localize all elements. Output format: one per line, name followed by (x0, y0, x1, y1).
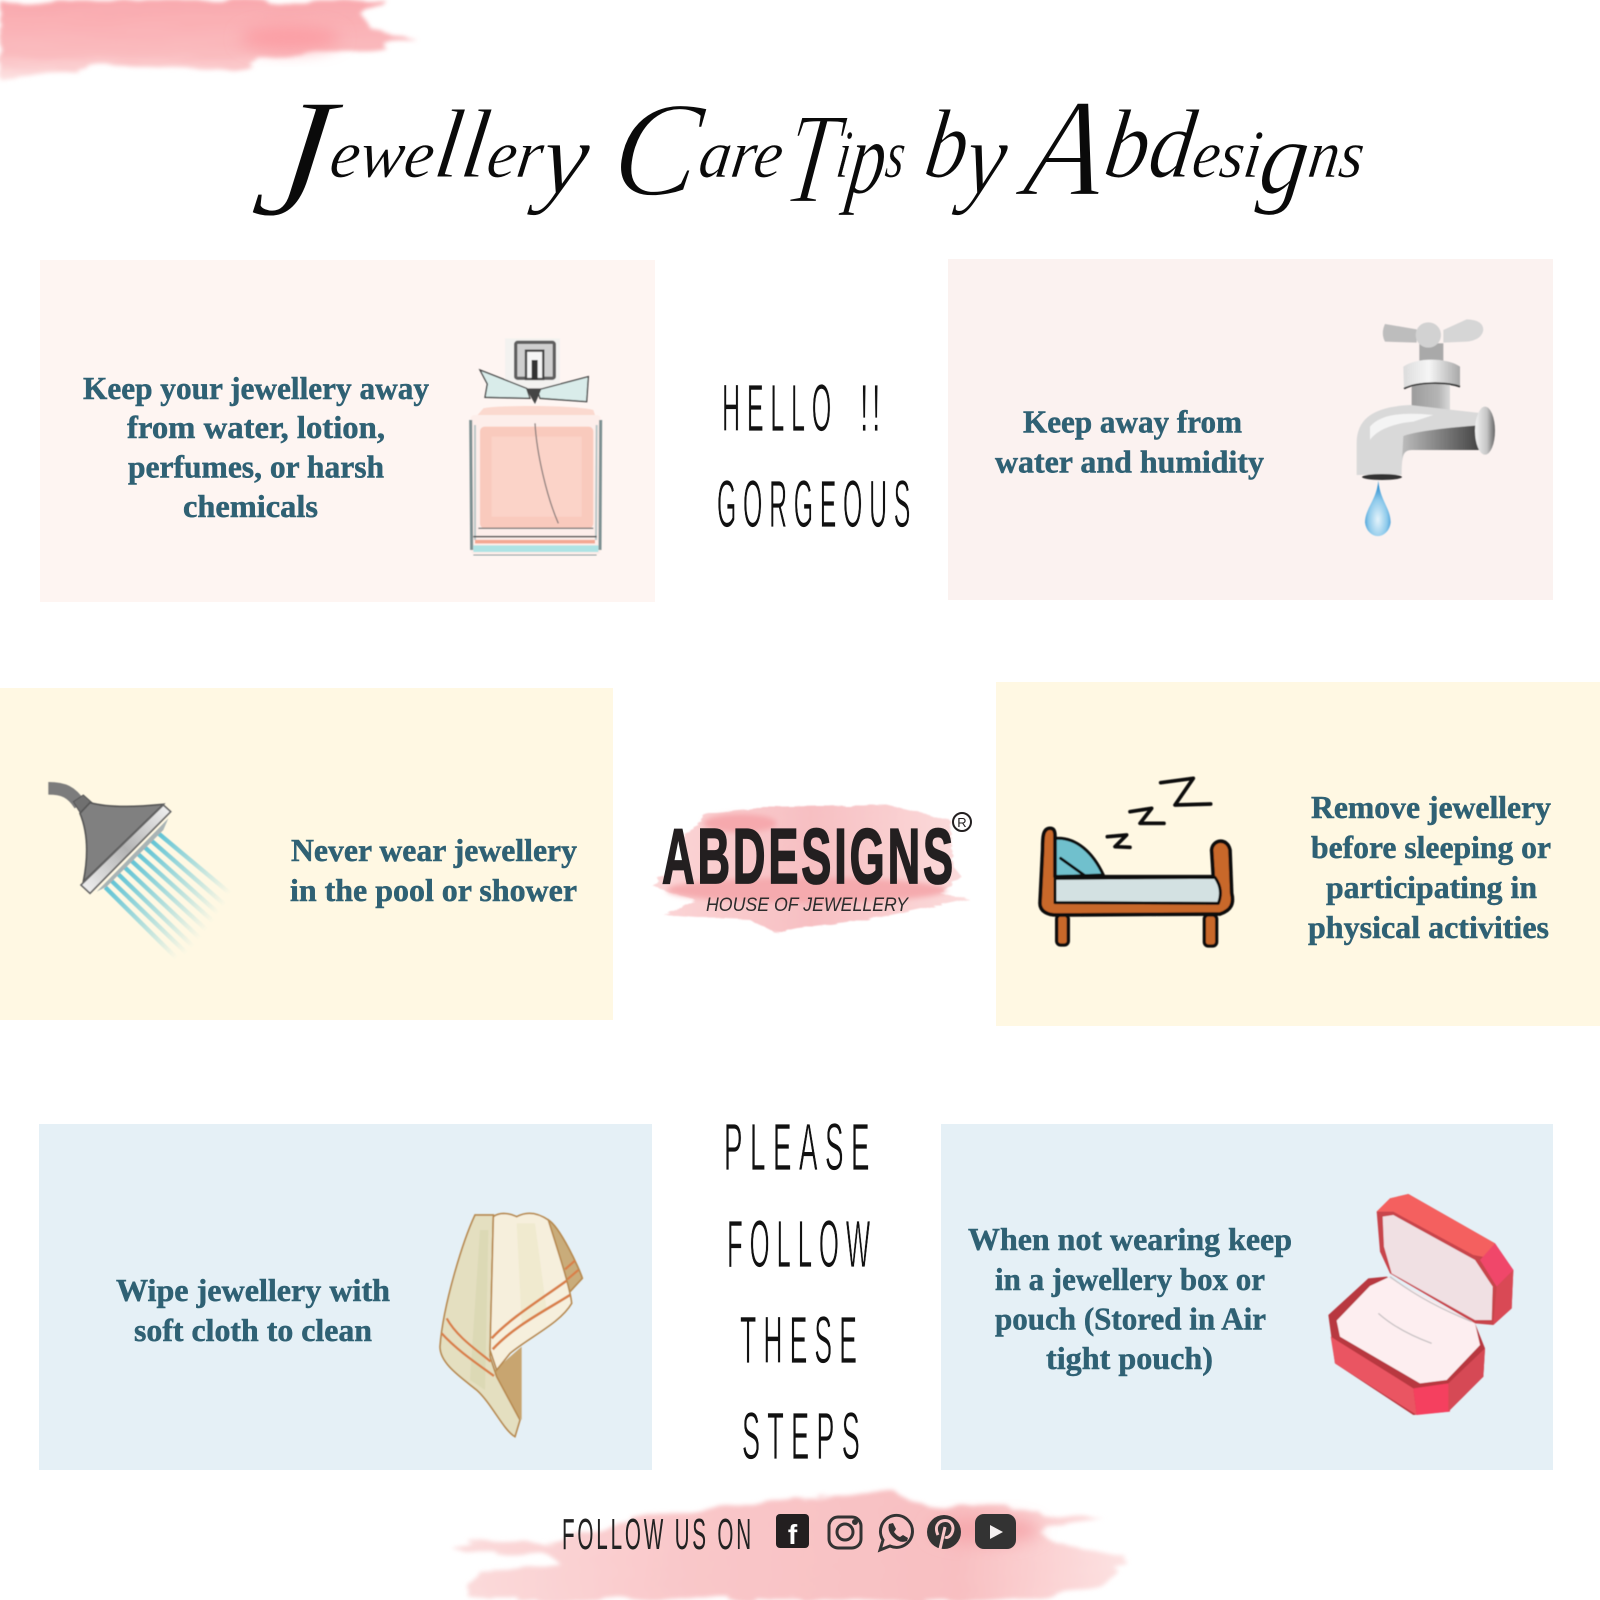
icon: pinterest (927, 1515, 961, 1549)
cloth tip text: Wipe jewellery with (116, 1272, 390, 1308)
title: g (1253, 99, 1317, 216)
box tip text: When not wearing keep (968, 1221, 1292, 1257)
icon: facebook: f (788, 1519, 798, 1550)
box tip text: pouch (Stored in Air (995, 1300, 1266, 1336)
water tip text: water and humidity (995, 443, 1264, 479)
perfume tip text: chemicals (183, 488, 318, 524)
title (243, 64, 1376, 252)
sleeping tip text: before sleeping or (1311, 829, 1551, 865)
title: are (695, 116, 789, 192)
panel: water tip (948, 259, 1553, 600)
icon: youtube (975, 1514, 1016, 1549)
panel: jewellery box tip (941, 1124, 1553, 1470)
title: y (526, 99, 597, 216)
greeting: hello gorgeous: HELLO (722, 371, 838, 446)
footer: follow us on (449, 1493, 1128, 1600)
box tip text (968, 1221, 1292, 1376)
sleeping tip text: Remove jewellery (1311, 789, 1551, 825)
title: bd (1098, 90, 1203, 199)
title: J (243, 64, 351, 252)
title: b (919, 90, 976, 199)
logo wordmark: ABDESIGNS (662, 812, 956, 900)
logo: Abdesigns house of jewellery (653, 805, 971, 932)
shower tip text: in the pool or shower (290, 872, 577, 908)
title: s (882, 116, 911, 192)
panel: pool and shower tip (0, 688, 613, 1020)
icon: ring box (1328, 1194, 1513, 1415)
icon: whatsapp (880, 1515, 912, 1550)
water tip text: Keep away from (1023, 404, 1242, 440)
greeting: hello gorgeous (717, 371, 917, 542)
logo watercolour brush (653, 805, 968, 932)
water tip text (995, 404, 1264, 479)
icon: perfume bottle (471, 338, 601, 555)
box tip text: in a jewellery box or (995, 1261, 1265, 1297)
footer: follow us on: FOLLOW US ON (562, 1510, 754, 1559)
text: THESE (740, 1303, 864, 1378)
panel: perfume tip (40, 260, 655, 602)
panel: sleeping tip (996, 682, 1600, 1026)
logo tagline: HOUSE OF JEWELLERY (706, 894, 910, 916)
title: esi (1188, 116, 1274, 192)
shower tip text: Never wear jewellery (291, 832, 577, 868)
cloth tip text (116, 1272, 390, 1348)
text: STEPS (742, 1399, 867, 1474)
title: ns (1304, 116, 1370, 192)
perfume tip text: Keep your jewellery away (83, 370, 429, 406)
icon: instagram (829, 1517, 861, 1548)
perfume tip text (83, 370, 429, 524)
sleeping tip text: physical activities (1308, 909, 1549, 945)
title: y (951, 99, 1015, 216)
icon: dripping tap (1357, 319, 1495, 536)
title: p (837, 99, 895, 216)
closing message: please follow these steps (724, 1110, 877, 1474)
icon: sleeping bed (1040, 778, 1232, 946)
sleeping tip text (1308, 789, 1551, 945)
panel: soft cloth tip (39, 1124, 652, 1470)
icon: facebook (776, 1514, 809, 1550)
title: ewe (326, 116, 440, 192)
perfume tip text: perfumes, or harsh (128, 448, 384, 484)
title: ller (428, 90, 550, 199)
title: A (1010, 72, 1117, 226)
box tip text: tight pouch) (1046, 1340, 1213, 1376)
icon: towel (440, 1213, 582, 1437)
title: i (833, 116, 856, 192)
text: PLEASE (724, 1110, 877, 1185)
title: T (777, 88, 853, 231)
registered mark: R (957, 815, 967, 830)
sleeping tip text: participating in (1326, 869, 1537, 905)
watercolour brush: footer (449, 1493, 1128, 1600)
icon: shower head (48, 788, 230, 958)
cloth tip text: soft cloth to clean (134, 1312, 372, 1348)
shower tip text (290, 832, 577, 908)
text: FOLLOW (727, 1207, 877, 1282)
watercolour brush: top left (0, 0, 415, 80)
text: GORGEOUS (717, 467, 917, 542)
title: C (604, 74, 713, 225)
registered mark (953, 813, 971, 831)
greeting: hello gorgeous: !! (860, 371, 884, 446)
perfume tip text: from water, lotion, (127, 409, 385, 445)
